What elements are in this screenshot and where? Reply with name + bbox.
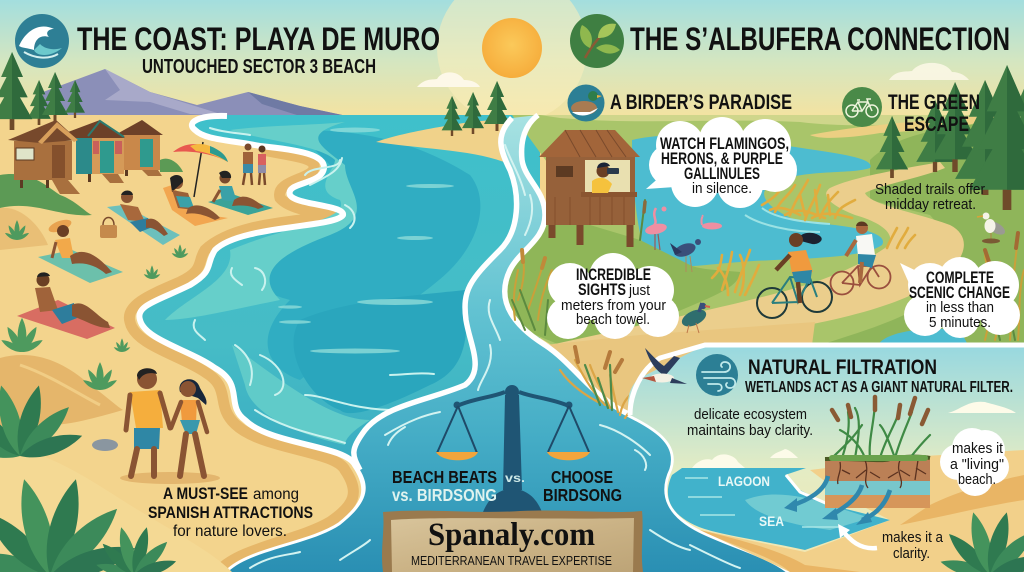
clouds	[417, 63, 969, 87]
hut 1	[8, 120, 80, 194]
left trees	[0, 52, 85, 130]
text: makes it a clarity	[882, 529, 944, 562]
lagoon	[632, 135, 883, 267]
gull on post	[977, 212, 1007, 244]
river	[228, 115, 790, 572]
cyclists	[757, 222, 890, 318]
male cyclist	[846, 222, 876, 283]
far wetland bands	[540, 115, 1024, 345]
text: delicate ecosystem: maintains bay clarity.	[687, 422, 813, 439]
heading: natural filtration: NATURAL FILTRATION	[748, 356, 937, 379]
sand path	[550, 162, 964, 350]
callout: incredible sights: just	[628, 282, 651, 299]
golden reeds	[712, 180, 915, 295]
north sand spit	[376, 118, 520, 170]
foam: river edges	[354, 115, 790, 572]
speech bubble: flamingos	[646, 117, 797, 208]
female cyclist bike	[757, 277, 832, 318]
cattail plant	[832, 397, 930, 458]
panel darker sand bands	[700, 475, 1024, 572]
lagoon and sea water	[668, 468, 890, 550]
speech bubble: living beach	[940, 428, 1009, 496]
walking couple	[120, 368, 220, 484]
callout: incredible sights: SIGHTS	[578, 281, 626, 299]
branding plaque: Spanaly.com	[428, 517, 595, 553]
natural filtration panel	[628, 345, 1024, 572]
callout: flamingos: HERONS, & PURPLE	[661, 150, 783, 168]
scale label: choose birdsong: CHOOSE	[551, 467, 613, 487]
woodland trees	[876, 65, 1024, 210]
scale label: choose birdsong: BIRDSONG	[543, 485, 622, 505]
scale label: beach beats: vs. BIRDSONG	[392, 485, 497, 505]
panel sand	[700, 450, 1024, 572]
sunbather man on red towel	[17, 272, 115, 339]
icon: leaves	[570, 14, 624, 68]
sun	[437, 0, 587, 123]
dunes	[0, 355, 232, 572]
text: must-see: for nature lovers.	[173, 523, 287, 540]
heading: the green escape: ESCAPE	[904, 113, 969, 136]
man	[126, 368, 170, 476]
callout: flamingos	[660, 135, 789, 197]
river highlights	[250, 145, 740, 568]
bird hide on stilts	[539, 130, 640, 247]
foam: sea shoreline	[139, 116, 364, 572]
callout: incredible sights	[561, 266, 666, 328]
text: must-see: SPANISH ATTRACTIONS	[148, 503, 313, 522]
woman	[171, 379, 207, 476]
text: must-see: A MUST-SEE	[163, 484, 248, 503]
swimming flamingo	[701, 216, 722, 230]
callout: living beach: beach.	[958, 471, 996, 488]
callout: scenic change: COMPLETE	[926, 269, 994, 287]
left beach sand	[0, 115, 240, 572]
flow arrows	[790, 476, 890, 548]
rock	[92, 439, 118, 451]
callout: living beach: a "living"	[950, 456, 1004, 473]
bottom right plant	[939, 510, 1024, 572]
callout: scenic change: in less than	[926, 299, 994, 316]
standing couple on beach	[243, 144, 266, 185]
callout: incredible sights: beach towel.	[576, 311, 650, 328]
lagoon ripples	[745, 208, 830, 232]
female cyclist	[776, 233, 822, 303]
text: shaded trails	[875, 181, 985, 213]
sunbather in chair	[163, 175, 228, 226]
callout: flamingos: in silence.	[692, 180, 752, 197]
label: sea: SEA	[759, 513, 784, 529]
small pond	[878, 329, 968, 345]
mountains	[43, 69, 347, 116]
beach huts	[8, 120, 163, 194]
heading: the green escape	[888, 91, 980, 136]
icon: wind	[696, 354, 738, 396]
water highlights	[194, 128, 434, 443]
heading: coast: THE COAST: PLAYA DE MURO	[77, 21, 440, 57]
wetland land	[505, 115, 1024, 350]
icon: bicycle	[842, 87, 882, 127]
text: must-see	[148, 484, 313, 540]
sunbather man on blue towel	[107, 190, 180, 245]
beach tufts	[0, 220, 189, 392]
birdwatcher	[592, 162, 619, 193]
scale label: choose birdsong	[543, 467, 622, 505]
text: makes it a clarity: clarity.	[893, 545, 930, 562]
speech bubble: sights	[547, 253, 679, 339]
subheading: coast: UNTOUCHED SECTOR 3 BEACH	[142, 56, 376, 78]
picnic basket	[100, 218, 117, 238]
upper left dune	[0, 208, 48, 250]
text: delicate ecosystem	[687, 406, 813, 439]
icon: wave	[15, 14, 69, 68]
branding plaque	[382, 511, 643, 572]
sunbather woman with hat	[38, 217, 123, 283]
text: makes it a clarity: makes it a	[882, 529, 944, 546]
callout: living beach	[950, 440, 1004, 488]
right edge reeds	[985, 233, 1024, 340]
large coastal plants	[0, 383, 178, 572]
branding plaque: MEDITERRANEAN TRAVEL EXPERTISE	[411, 554, 612, 568]
purple gallinule	[679, 303, 710, 333]
text: shaded trails: Shaded trails offer	[875, 181, 985, 198]
distant pines	[442, 81, 510, 136]
lower reed clump	[560, 347, 645, 418]
scale label: beach beats: BEACH BEATS	[392, 467, 497, 487]
sky background	[0, 0, 1024, 125]
heading: the green escape: THE GREEN	[888, 91, 980, 114]
wet sand band along shore	[129, 150, 353, 570]
text: shaded trails: midday retreat.	[885, 196, 976, 213]
green shrubs by huts	[0, 159, 183, 215]
scale label: beach beats	[392, 467, 497, 505]
panel clouds	[692, 402, 1016, 468]
scale label: vs: vs.	[505, 471, 525, 485]
green bank under hide and birds	[505, 215, 740, 345]
beach umbrella	[173, 142, 228, 197]
text: must-see: among	[253, 486, 299, 503]
callout: flamingos: GALLINULES	[684, 165, 760, 183]
flow arrowheads	[784, 498, 872, 538]
callout: living beach: makes it	[952, 440, 1004, 457]
sunbather 3	[208, 171, 273, 215]
speech bubble: scenic change	[900, 257, 1020, 338]
scales of balance	[436, 385, 590, 512]
flying bird	[642, 348, 687, 384]
text: delicate ecosystem: delicate ecosystem	[694, 406, 807, 423]
hut 3	[115, 120, 163, 176]
heading: birder's paradise: A BIRDER’S PARADISE	[610, 91, 792, 114]
flamingo	[644, 206, 668, 250]
deep water shapes	[165, 122, 480, 445]
male cyclist bike	[830, 266, 890, 294]
water sparkles	[278, 128, 454, 354]
soil cross-section	[825, 457, 930, 508]
wetland reed clump	[512, 200, 645, 335]
callout: flamingos: WATCH FLAMINGOS,	[660, 135, 789, 153]
hut 2	[68, 120, 125, 183]
label: lagoon: LAGOON	[718, 473, 770, 489]
sea	[139, 115, 540, 572]
callout: scenic change	[909, 269, 1010, 331]
callout: incredible sights: meters from your	[561, 297, 666, 314]
sand strip above panel	[545, 322, 815, 418]
heron wading bird	[670, 239, 701, 272]
icon: duck	[568, 84, 604, 122]
callout: scenic change: 5 minutes.	[929, 314, 991, 331]
panel water detail	[685, 475, 870, 530]
callout: incredible sights: INCREDIBLE	[576, 266, 651, 284]
